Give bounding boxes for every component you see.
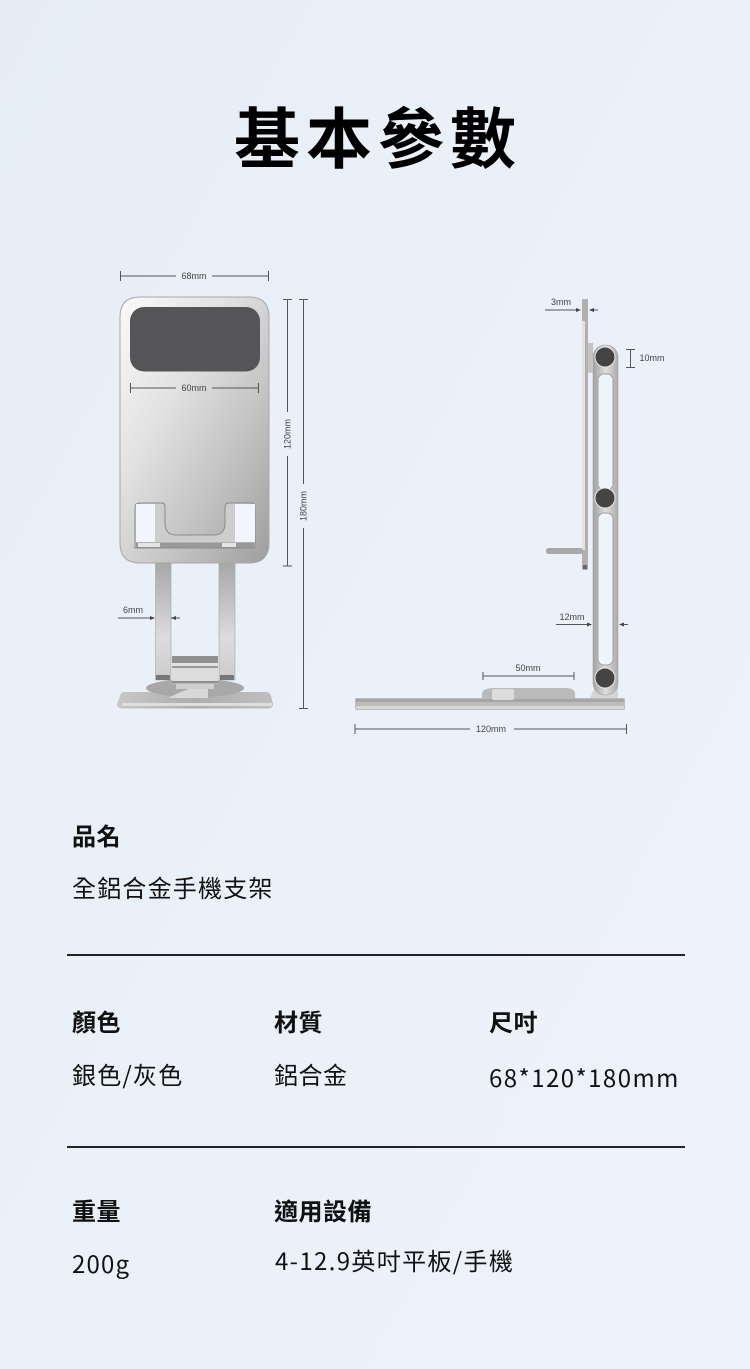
- side view of phone stand with dimensions: [355, 297, 665, 734]
- dimension: 120mm width: [355, 724, 626, 734]
- dimension: 12mm: [556, 612, 628, 626]
- icon: base plate side: [355, 684, 625, 710]
- dimension: 180mm: 180mm: [298, 491, 308, 521]
- spec: product name: 品名: [72, 817, 121, 852]
- dimension: 10mm: 10mm: [639, 353, 665, 363]
- icon: panel edge and stub: [546, 299, 588, 570]
- divider line: [67, 1146, 685, 1148]
- spec: colour: [72, 1003, 183, 1091]
- dimension: 12mm: 12mm: [559, 612, 585, 622]
- icon: front panel: [120, 297, 269, 563]
- dimension: 68mm: [120, 271, 268, 281]
- dimension: 60mm: 60mm: [181, 383, 207, 393]
- spec: material: 鋁合金: [274, 1056, 348, 1091]
- icon: back arm with slots: [588, 343, 618, 695]
- dimension: 10mm: [626, 350, 665, 368]
- dimension: 68mm: 68mm: [181, 271, 207, 281]
- icon: pivot circles: [595, 347, 615, 688]
- dimension: 60mm: [130, 383, 258, 393]
- spec: product name: [72, 817, 274, 904]
- spec: weight: 重量: [72, 1192, 121, 1227]
- spec: colour: 銀色/灰色: [72, 1056, 183, 1091]
- spec: material: [274, 1003, 348, 1091]
- icon: stand legs: [156, 560, 235, 680]
- spec: product name: 全鋁合金手機支架: [72, 869, 274, 904]
- dimension: 180mm: [298, 300, 308, 708]
- dimension: 120mm width: 120mm: [476, 724, 506, 734]
- spec: size: 尺吋: [489, 1003, 538, 1038]
- spec: compatible devices: 適用設備: [274, 1192, 372, 1227]
- dimension: 50mm: [483, 663, 574, 680]
- dimension: 6mm: 6mm: [123, 605, 143, 615]
- icon: hinge: [172, 656, 218, 689]
- spec: colour: 顏色: [72, 1003, 121, 1038]
- spec: size: 68*120*180mm: [489, 1059, 680, 1094]
- dimension: 3mm: 3mm: [551, 297, 571, 307]
- dimension: 120mm: [282, 300, 292, 566]
- dimension: 50mm: 50mm: [515, 663, 541, 673]
- title: 基本參數: [234, 86, 522, 182]
- icon: base plate: [117, 679, 273, 708]
- divider line: [67, 954, 685, 956]
- front view of phone stand with dimensions: [117, 271, 308, 708]
- dimension: 3mm: [545, 297, 598, 312]
- dimension: 6mm: [118, 605, 180, 620]
- dimension: 120mm: 120mm: [282, 419, 292, 449]
- spec: weight: [72, 1192, 130, 1280]
- spec: compatible devices: [274, 1192, 514, 1277]
- spec: weight: 200g: [72, 1245, 130, 1280]
- spec: compatible devices: 4-12.9英吋平板/手機: [275, 1242, 514, 1277]
- spec: size: [489, 1003, 680, 1094]
- spec: material: 材質: [274, 1003, 323, 1038]
